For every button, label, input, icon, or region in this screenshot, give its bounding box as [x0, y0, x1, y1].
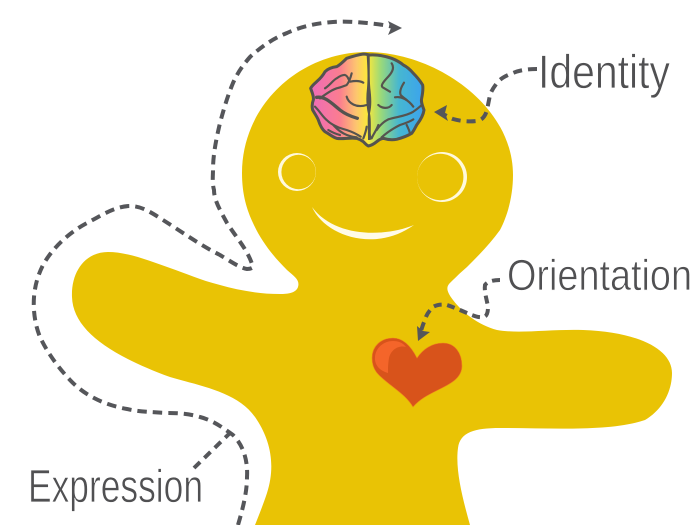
- brain midline: [366, 55, 371, 140]
- left eye: [278, 153, 316, 191]
- brain folds: [315, 63, 422, 138]
- right eye: [417, 152, 467, 202]
- arrow: expression path around the body to the head: [34, 21, 402, 525]
- label: Identity: Identity: [538, 45, 670, 98]
- arrow: identity pointer: [434, 69, 537, 121]
- smile: [312, 207, 414, 239]
- arrow: expression label pointer: [194, 432, 231, 468]
- arrow: orientation pointer: [417, 280, 500, 341]
- icon: heart: [372, 338, 462, 407]
- icon: rainbow brain: [311, 54, 424, 146]
- label: Expression: Expression: [28, 460, 203, 512]
- gingerbread body: [72, 52, 672, 525]
